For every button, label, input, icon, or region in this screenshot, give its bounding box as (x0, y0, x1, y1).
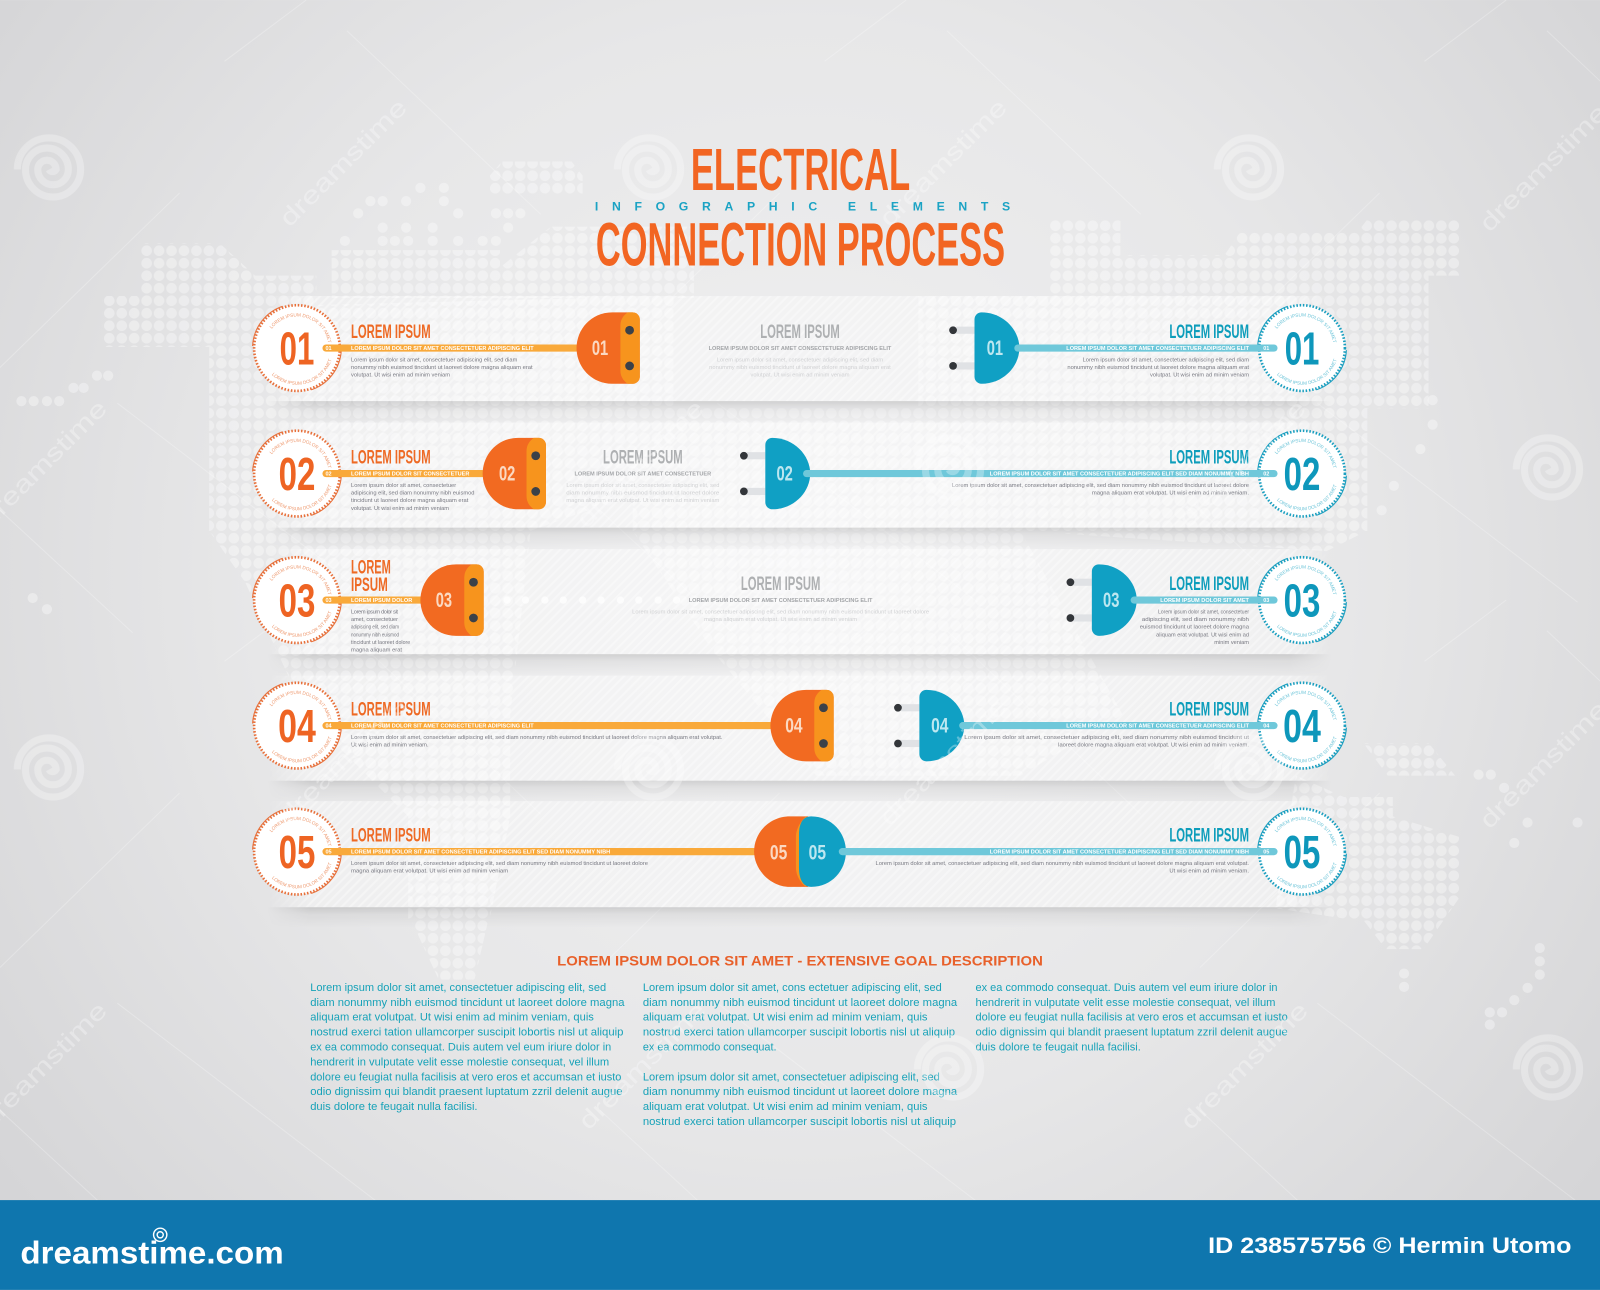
title (595, 136, 1010, 278)
row 1 right cord (1014, 344, 1278, 352)
row 3 left text: LOREM IPSUM DOLOR (351, 598, 412, 604)
row 5 blue badge: LOREM IPSUM DOLOR SIT AMET (1274, 816, 1336, 846)
watermark wordmarks: dreamstime (275, 94, 413, 232)
row 4 left text: Lorem ipsum dolor sit amet, consectetuer adipiscing elit, sed diam nonummy nibh euismod tincidunt ut laoreet dolore magna aliquam erat volutpat. (351, 735, 723, 741)
row 3 left text: adipiscing elit, sed diam (351, 625, 399, 631)
row 4 right text: laoreet dolore magna aliquam erat volutpat. Ut wisi enim ad minim veniam. (1058, 743, 1249, 749)
watermark wordmarks: dreamstime (1176, 997, 1314, 1135)
row 4 blue plug (894, 690, 964, 761)
row 2 (252, 422, 1347, 538)
watermark wordmarks: dreamstime (875, 94, 1013, 232)
row 2 left text: volutpat. Ut wisi enim ad minim veniam (351, 506, 449, 512)
title line: connection process: CONNECTION PROCESS (596, 210, 1005, 278)
row 3 orange plug: 03 (436, 588, 452, 612)
description column 2: Lorem ipsum dolor sit amet, cons ectetuer adipiscing elit, sed (643, 982, 942, 994)
row 1 right text: LOREM IPSUM (1169, 321, 1249, 343)
row 4 blue badge: LOREM IPSUM DOLOR SIT AMET (1274, 690, 1336, 720)
row 3 right text: minim veniam (1214, 640, 1249, 646)
description column 3: odio dignissim qui blandit praesent luptatum zzril delenit augue (976, 1027, 1288, 1039)
row 4 left text: Ut wisi enim ad minim veniam. (351, 743, 429, 749)
row 4 orange badge: 04 (278, 700, 316, 752)
row 4 orange badge (252, 681, 342, 770)
row 5 right text: LOREM IPSUM (1169, 824, 1249, 846)
description column 2: diam nonummy nibh euismod tincidunt ut laoreet dolore magna (643, 1086, 958, 1098)
row 3 middle text: Lorem ipsum dolor sit amet, consectetuer adipiscing elit, sed diam nonummy nibh euismod tincidunt ut laoreet dolore (632, 609, 929, 615)
row 5 blue badge: LOREM IPSUM DOLOR SIT AMET (1277, 862, 1336, 888)
row 3 blue badge: LOREM IPSUM DOLOR SIT AMET (1277, 610, 1336, 637)
row 5 left text: LOREM IPSUM (351, 824, 431, 846)
row 4 left text (326, 698, 723, 749)
title line: electrical: ELECTRICAL (691, 136, 910, 203)
row 3 blue plug (1067, 564, 1137, 636)
row 4 blue badge: 04 (1283, 700, 1321, 752)
row 1 right text: Lorem ipsum dolor sit amet, consectetuer adipiscing elit, sed diam (1083, 357, 1249, 363)
description column 2: aliquam erat volutpat. Ut wisi enim ad minim veniam, quis (643, 1012, 928, 1024)
row 5 right text: Ut wisi enim ad minim veniam. (1169, 869, 1249, 875)
row 4 orange plug: 04 (785, 714, 803, 738)
row 5 right cord (839, 848, 1278, 855)
description column 1: hendrerit in vulputate velit esse molestie consequat, vel illum (310, 1056, 609, 1068)
row 2 orange badge: 02 (279, 448, 315, 500)
row 2 orange plug: 02 (499, 462, 515, 486)
row 1 (252, 296, 1347, 412)
row 1 blue badge: LOREM IPSUM DOLOR SIT AMET (1274, 313, 1336, 342)
row 4 left text: LOREM IPSUM (351, 698, 431, 720)
row 1 orange plug: 01 (592, 336, 608, 360)
row 2 right text: Lorem ipsum dolor sit amet, consectetuer adipiscing elit, sed diam nonummy nibh euismod tincidunt ut laoreet dolore (952, 483, 1249, 489)
subtitle: INFOGRAPHIC ELEMENTS (595, 199, 1010, 213)
row 3 left text: 03 (326, 598, 332, 604)
row 3 right text: LOREM IPSUM DOLOR SIT AMET (1160, 598, 1250, 604)
row 2 orange plug (483, 438, 546, 509)
row 3 blue badge (1257, 556, 1347, 644)
row 3 left text: IPSUM (351, 574, 388, 596)
row 3 right text: adipiscing elit, sed diam nonummy nibh (1142, 617, 1249, 623)
row 5 orange badge: LOREM IPSUM DOLOR SIT AMET (272, 862, 332, 888)
watermark spirals (17, 138, 1580, 1097)
row 1 orange badge: 01 (280, 322, 314, 374)
description column 2 (643, 982, 958, 1128)
row 4 left cord (322, 722, 773, 729)
row 5 right text (876, 824, 1269, 875)
row 4 right text: Lorem ipsum dolor sit amet, consectetuer adipiscing elit, sed diam nonummy nibh euismod tincidunt ut (964, 735, 1249, 741)
row 2 left text: 02 (326, 472, 332, 478)
row 3 right text: euismod tincidunt ut laoreet dolore magna (1140, 625, 1250, 631)
description column 1: aliquam erat volutpat. Ut wisi enim ad minim veniam, quis (310, 1012, 594, 1024)
row 1 orange badge (252, 304, 342, 392)
row 3 left text: LOREM (351, 557, 391, 579)
footer bar (0, 1200, 1600, 1290)
row 4 orange badge: LOREM IPSUM DOLOR SIT AMET (272, 736, 332, 762)
row 3 left text: Lorem ipsum dolor sit (351, 609, 398, 615)
row 3 middle text: LOREM IPSUM DOLOR SIT AMET CONSECTETUER ADIPISCING ELIT (689, 598, 873, 604)
row 2 middle text: magna aliquam erat volutpat. Ut wisi enim ad minim veniam (566, 498, 720, 504)
row 2 blue plug: 02 (777, 462, 793, 486)
description column 1: dolore eu feugiat nulla facilisis at vero eros et accumsan et iusto (310, 1071, 621, 1083)
row 5 (252, 801, 1347, 918)
row 3 right text: Lorem ipsum dolor sit amet, consectetuer (1158, 609, 1249, 615)
row 4 right text: LOREM IPSUM (1169, 698, 1249, 720)
row 4 right text: LOREM IPSUM DOLOR SIT AMET CONSECTETUER ADIPISCING ELIT (1066, 724, 1250, 730)
row 5 right text: LOREM IPSUM DOLOR SIT AMET CONSECTETUER ADIPISCING ELIT SED DIAM NONUMMY NIBH (990, 850, 1249, 856)
row 5 left text: magna aliquam erat volutpat. Ut wisi enim ad minim veniam (351, 869, 508, 875)
watermark wordmarks: dreamstime (1174, 395, 1312, 533)
dotted world map (16, 162, 1582, 1030)
row 3 panel (267, 549, 1332, 675)
row 3 left text: magna aliquam erat (351, 648, 402, 654)
row 2 right text: magna aliquam erat volutpat. Ut wisi enim ad minim veniam. (1092, 490, 1249, 496)
description column 3: hendrerit in vulputate velit esse molestie consequat, vel illum (976, 997, 1276, 1009)
row 2 blue plug (740, 438, 810, 509)
description column 1: ex ea commodo consequat. Duis autem vel eum iriure dolor in (310, 1042, 611, 1054)
row 1 left text: LOREM IPSUM (351, 321, 431, 343)
row 1 middle text (709, 321, 892, 379)
description column 3 (976, 982, 1288, 1054)
row 2 right text: 02 (1263, 472, 1269, 478)
row 3 right text: aliquam erat volutpat. Ut wisi enim ad (1156, 632, 1249, 638)
description column 3: duis dolore te feugait nulla facilisi. (976, 1042, 1141, 1054)
description column 3: dolore eu feugiat nulla facilisis at vero eros et accumsan et iusto (976, 1012, 1288, 1024)
row 3 orange plug (420, 564, 484, 636)
watermark wordmarks: dreamstime (572, 395, 710, 533)
description column 2: Lorem ipsum dolor sit amet, consectetuer adipiscing elit, sed (643, 1071, 940, 1083)
row 4 right cord (959, 722, 1278, 729)
row 1 left text (326, 321, 534, 379)
row 2 panel (280, 422, 1319, 538)
description column 1: nostrud exerci tation ullamcorper suscipit lobortis nisl ut aliquip (310, 1027, 623, 1039)
row 2 left text: adipiscing elit, sed diam nonummy nibh euismod (351, 490, 474, 496)
row 1 orange badge: LOREM IPSUM DOLOR SIT AMET (272, 358, 332, 385)
row 5 left text (326, 824, 648, 875)
row 2 left text: LOREM IPSUM (351, 446, 431, 468)
row 2 blue badge (1257, 429, 1347, 518)
description column 2: nostrud exerci tation ullamcorper suscipit lobortis nisl ut aliquip (643, 1027, 955, 1039)
row 3 middle text (632, 573, 929, 623)
row 2 right cord (803, 470, 1278, 477)
description column 1: duis dolore te feugait nulla facilisi. (310, 1101, 478, 1113)
row 4 left text: LOREM IPSUM DOLOR SIT AMET CONSECTETUER ADIPISCING ELIT (351, 724, 534, 730)
row 4 blue plug: 04 (931, 714, 949, 738)
row 2 middle text: LOREM IPSUM (603, 446, 683, 468)
description column 1 (310, 982, 625, 1113)
row 1 middle text: nonummy nibh euismod tincidunt ut laoreet dolore magna aliquam erat (709, 365, 891, 371)
row 3 orange badge (252, 556, 342, 644)
row 5 connected plug (754, 816, 846, 887)
row 5 left text: Lorem ipsum dolor sit amet, consectetuer adipiscing elit, sed diam nonummy nibh euismod tincidunt ut laoreet dolore (351, 861, 648, 867)
description column 2: nostrud exerci tation ullamcorper suscipit lobortis nisl ut aliquip (643, 1116, 956, 1128)
row 2 left cord (322, 470, 486, 477)
description column 2: ex ea commodo consequat. (643, 1042, 777, 1054)
row 1 middle text: LOREM IPSUM DOLOR SIT AMET CONSECTETUER ADIPISCING ELIT (709, 346, 892, 352)
row 3 middle text: magna aliquam erat volutpat. Ut wisi enim ad minim veniam (704, 617, 857, 623)
row 1 left text: LOREM IPSUM DOLOR SIT AMET CONSECTETUER ADIPISCING ELIT (351, 346, 534, 352)
row 3 right cord (1131, 597, 1278, 604)
row 1 right text: volutpat. Ut wisi enim ad minim veniam (1150, 373, 1249, 379)
row 5 panel (267, 801, 1332, 928)
row 2 left text: tincidunt ut laoreet dolore magna aliquam erat (351, 498, 469, 504)
row 1 blue badge: 01 (1285, 322, 1319, 374)
row 1 left cord (322, 344, 580, 352)
row 3 orange badge: LOREM IPSUM DOLOR SIT AMET (272, 610, 332, 637)
row 2 left text: LOREM IPSUM DOLOR SIT CONSECTETUER (351, 472, 469, 478)
row 3 middle text: LOREM IPSUM (741, 573, 820, 595)
row 3 left text: tincidunt ut laoreet dolore (351, 640, 410, 646)
row 5 right text: 05 (1263, 850, 1269, 856)
row 1 middle text: volutpat. Ut wisi enim ad minim veniam (751, 373, 850, 379)
watermark wordmarks: dreamstime (1475, 99, 1600, 237)
row 2 orange badge: LOREM IPSUM DOLOR SIT AMET (272, 484, 332, 510)
row 1 blue badge: LOREM IPSUM DOLOR SIT AMET (1277, 358, 1336, 385)
watermark wordmarks: dreamstime (875, 693, 1013, 831)
row 5 left text: 05 (326, 850, 332, 856)
row 4 blue badge (1257, 681, 1347, 770)
row 2 right text (952, 446, 1269, 496)
row 1 left text: nonummy nibh euismod tincidunt ut laoreet dolore magna aliquam erat (351, 365, 533, 371)
row 4 right text: 04 (1263, 724, 1270, 730)
footer logo: dreamstime.com (20, 1234, 284, 1270)
row 1 left text: Lorem ipsum dolor sit amet, consectetuer adipiscing elit, sed diam (351, 357, 518, 363)
row 3 blue badge: LOREM IPSUM DOLOR SIT AMET (1274, 565, 1336, 594)
row 3 left text: amet, consectetuer (351, 617, 398, 623)
row 5 blue badge: 05 (1284, 826, 1320, 878)
row 1 blue plug (949, 312, 1019, 384)
row 3 orange badge: LOREM IPSUM DOLOR SIT AMET (270, 565, 332, 594)
row 2 middle text: diam nonummy nibh euismod tincidunt ut laoreet dolore (566, 490, 719, 496)
row 5 right text: Lorem ipsum dolor sit amet, consectetuer adipiscing elit, sed diam nonummy nibh euismod tincidunt ut laoreet dolore magna aliquam erat volutpat. (876, 861, 1249, 867)
row 2 orange badge (252, 429, 342, 518)
row 3 right text: 03 (1263, 598, 1269, 604)
row 4 (252, 676, 1347, 792)
row 3 orange badge: 03 (279, 574, 315, 626)
description column 2: diam nonummy nibh euismod tincidunt ut laoreet dolore magna (643, 997, 958, 1009)
row 2 middle text: LOREM IPSUM DOLOR SIT AMET CONSECTETUER (574, 472, 711, 478)
row 1 middle text: LOREM IPSUM (760, 321, 840, 343)
row 1 left text: 01 (326, 346, 332, 352)
row 3 left text: nonummy nibh euismod (351, 632, 399, 638)
watermark wordmarks: dreamstime (1475, 696, 1600, 834)
row 5 blue badge (1257, 808, 1347, 896)
row 2 left text (326, 446, 474, 512)
row 5 left cord (322, 848, 757, 855)
row 1 right text: 01 (1263, 346, 1269, 352)
row 1 blue badge (1257, 304, 1347, 392)
row 4 left text: 04 (326, 724, 333, 730)
description heading: LOREM IPSUM DOLOR SIT AMET - EXTENSIVE GOAL DESCRIPTION (557, 953, 1043, 969)
row 4 orange badge: LOREM IPSUM DOLOR SIT AMET (270, 690, 332, 720)
row 2 right text: LOREM IPSUM (1169, 446, 1249, 468)
row 3 left cord (322, 597, 424, 604)
row 1 right text (1066, 321, 1269, 379)
row 2 left text: Lorem ipsum dolor sit amet, consectetuer (351, 483, 456, 489)
row 5 connected plug: 05 (770, 840, 787, 864)
row 2 right text: LOREM IPSUM DOLOR SIT AMET CONSECTETUER ADIPISCING ELIT SED DIAM NONUMMY NIBH (990, 472, 1249, 478)
watermark wordmarks: dreamstime (574, 997, 712, 1135)
row 1 right text: nonummy nibh euismod tincidunt ut laoreet dolore magna aliquam erat (1067, 365, 1249, 371)
description column 3: ex ea commodo consequat. Duis autem vel eum iriure dolor in (976, 982, 1278, 994)
description column 1: odio dignissim qui blandit praesent luptatum zzril delenit augue (310, 1086, 622, 1098)
row 3 left text (326, 557, 412, 654)
row 2 middle text: Lorem ipsum dolor sit amet, consectetuer adipiscing elit, sed (566, 483, 719, 489)
row 3 right text (1140, 573, 1269, 646)
row 1 right text: LOREM IPSUM DOLOR SIT AMET CONSECTETUER ADIPISCING ELIT (1066, 346, 1250, 352)
row 5 orange badge: 05 (279, 826, 315, 878)
row 3 right text: LOREM IPSUM (1169, 573, 1249, 595)
row 3 (252, 549, 1347, 665)
description column 1: diam nonummy nibh euismod tincidunt ut laoreet dolore magna (310, 997, 625, 1009)
row 1 left text: volutpat. Ut wisi enim ad minim veniam (351, 373, 450, 379)
footer credit: ID 238575756 © Hermin Utomo (1208, 1233, 1571, 1258)
row 4 orange plug (770, 690, 834, 761)
row 1 blue plug: 01 (987, 336, 1003, 360)
row 1 orange badge: LOREM IPSUM DOLOR SIT AMET (270, 313, 332, 342)
row 2 middle text (566, 446, 720, 504)
row 3 blue badge: 03 (1284, 574, 1320, 626)
row 4 blue badge: LOREM IPSUM DOLOR SIT AMET (1277, 736, 1336, 762)
description column 2: aliquam erat volutpat. Ut wisi enim ad minim veniam, quis (643, 1101, 928, 1113)
row 3 dot trail (503, 596, 680, 604)
row 2 orange badge: LOREM IPSUM DOLOR SIT AMET (270, 438, 332, 468)
row 2 blue badge: LOREM IPSUM DOLOR SIT AMET (1277, 484, 1336, 510)
row 1 panel (280, 296, 1319, 412)
row 2 blue badge: LOREM IPSUM DOLOR SIT AMET (1274, 438, 1336, 468)
row 5 connected plug: 05 (809, 840, 826, 864)
row 2 blue badge: 02 (1284, 448, 1320, 500)
description column 1: Lorem ipsum dolor sit amet, consectetuer adipiscing elit, sed (310, 982, 606, 994)
row 4 panel (267, 676, 1332, 801)
watermark wordmarks: dreamstime (275, 691, 413, 829)
row 5 left text: LOREM IPSUM DOLOR SIT AMET CONSECTETUER ADIPISCING ELIT SED DIAM NONUMMY NIBH (351, 850, 610, 856)
row 5 orange badge: LOREM IPSUM DOLOR SIT AMET (270, 816, 332, 846)
row 1 orange plug (577, 312, 640, 384)
row 4 right text (964, 698, 1270, 749)
row 5 orange badge (252, 808, 342, 896)
row 3 blue plug: 03 (1103, 588, 1119, 612)
row 1 middle text: Lorem ipsum dolor sit amet, consectetuer adipiscing elit, sed diam (717, 357, 883, 363)
